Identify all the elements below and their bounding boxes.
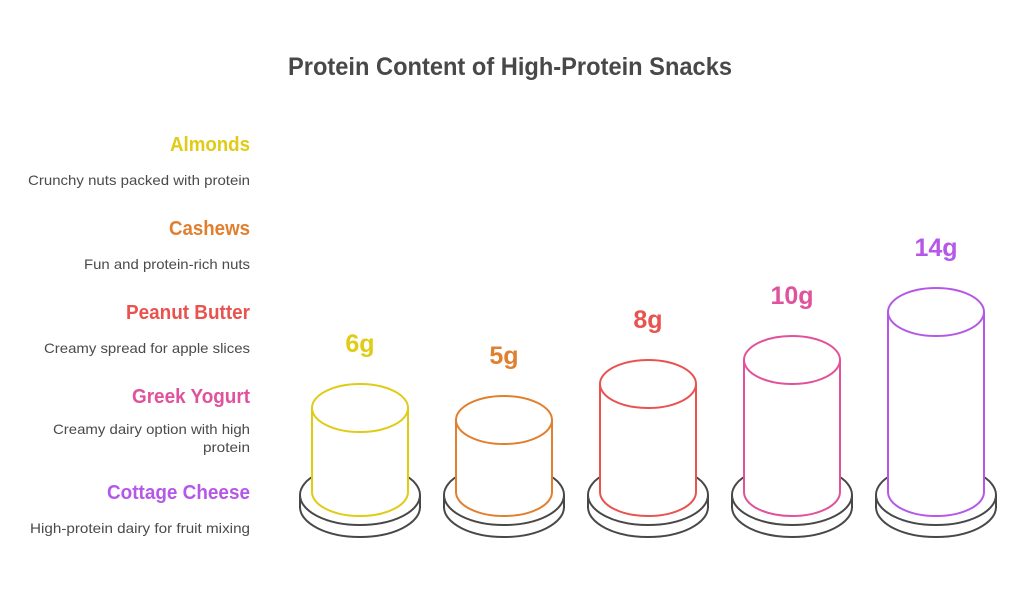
legend: almonds: Crunchy nuts packed with protein	[28, 172, 250, 188]
legend: almonds: Almonds	[170, 134, 250, 156]
legend: greek yogurt: Greek Yogurt	[132, 386, 250, 408]
legend: peanut butter: Peanut Butter	[126, 302, 250, 324]
bar: almonds 6g	[300, 330, 420, 537]
bar: peanut butter 8g	[588, 306, 708, 537]
legend: cashews: Cashews	[169, 218, 250, 240]
legend: cashews	[84, 218, 250, 272]
bar: cottage cheese 14g	[876, 234, 996, 537]
bar: cashews 5g: 5g	[489, 342, 519, 370]
bar: peanut butter 8g: 8g	[633, 306, 663, 334]
legend: cottage cheese: Cottage Cheese	[107, 482, 250, 504]
legend: cottage cheese: High-protein dairy for fruit mixing	[30, 520, 250, 536]
legend: cashews: Fun and protein-rich nuts	[84, 256, 250, 272]
legend: greek yogurt: Creamy dairy option with high	[53, 421, 250, 437]
bar: greek yogurt 10g	[732, 282, 852, 537]
legend: peanut butter	[44, 302, 250, 356]
title: Protein Content of High-Protein Snacks	[288, 53, 732, 81]
legend: greek yogurt	[53, 386, 250, 455]
legend: peanut butter: Creamy spread for apple slices	[44, 340, 250, 356]
bar: greek yogurt 10g: 10g	[770, 282, 814, 310]
legend: greek yogurt: protein	[203, 439, 250, 455]
legend: almonds	[28, 134, 250, 188]
bar: cottage cheese 14g: 14g	[914, 234, 958, 262]
legend: cottage cheese	[30, 482, 250, 536]
bar: almonds 6g: 6g	[345, 330, 375, 358]
bar: cashews 5g	[444, 342, 564, 537]
